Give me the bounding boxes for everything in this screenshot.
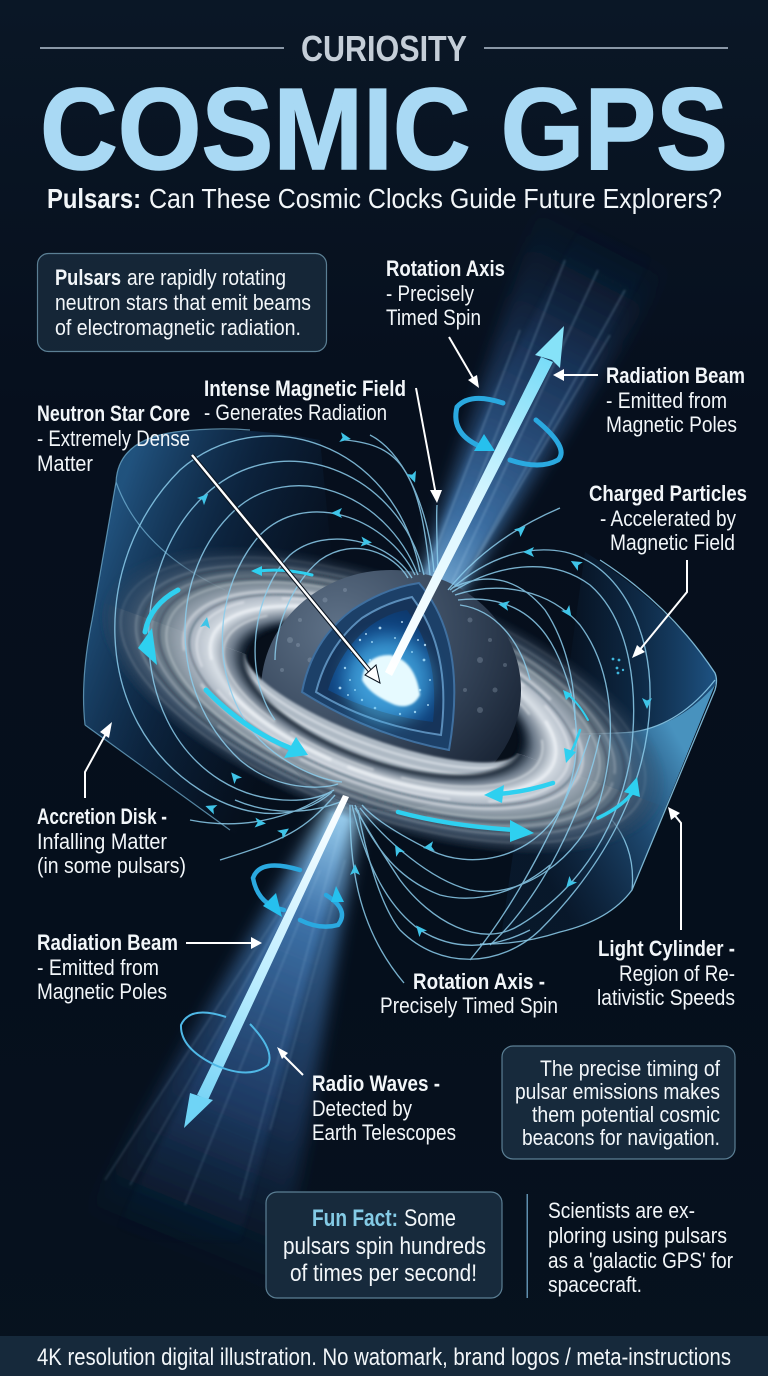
top rule left — [40, 47, 284, 49]
callout arrows — [85, 337, 687, 1075]
label: radiation beam top — [606, 363, 745, 437]
label: light cylinder: lativistic Speeds — [597, 985, 735, 1010]
label: rotation axis lower: Rotation Axis - — [413, 969, 545, 994]
label: intense magnetic field: Intense Magnetic Field — [204, 376, 406, 401]
radio wave ring — [181, 1012, 270, 1072]
label: light cylinder: Region of Re- — [619, 961, 735, 986]
label: rotation axis top — [386, 256, 505, 330]
main beam arrow: down — [184, 795, 349, 1128]
label: neutron star core — [37, 401, 190, 476]
light cylinder: left wall — [84, 429, 340, 838]
cutaway wedge — [302, 583, 454, 750]
text: scientists: spacecraft. — [548, 1272, 642, 1297]
panel: fun fact: pulsars spin hundreds — [283, 1233, 486, 1260]
label: radiation beam lower: Magnetic Poles — [37, 979, 167, 1004]
label: charged particles: - Accelerated by — [600, 506, 737, 531]
field line arrowheads — [197, 432, 652, 937]
accretion disk: back layer — [59, 481, 707, 919]
disk arrowheads — [138, 566, 640, 842]
label: neutron star core: Neutron Star Core — [37, 401, 190, 426]
label: radiation beam lower: Radiation Beam — [37, 930, 178, 955]
label: radio waves: Detected by — [312, 1096, 413, 1121]
panel: precise timing: them potential cosmic — [532, 1102, 720, 1127]
label: radio waves — [312, 1071, 456, 1145]
accretion disk: front layer — [116, 609, 642, 850]
label: accretion disk: Infalling Matter — [37, 829, 167, 854]
panel: pulsars intro: are rapidly rotating — [127, 265, 286, 290]
panel: fun fact — [266, 1192, 502, 1298]
label: radio waves: Radio Waves - — [312, 1071, 440, 1096]
subtitle: Pulsars: — [47, 183, 141, 214]
panel: fun fact: Some — [404, 1205, 456, 1232]
label: radiation beam lower — [37, 930, 178, 1004]
label: light cylinder: Light Cylinder - — [598, 936, 735, 961]
neutron star core glow — [344, 636, 432, 724]
panel: precise timing — [502, 1046, 735, 1159]
label: neutron star core: Matter — [37, 451, 93, 476]
label: rotation axis top: - Precisely — [386, 281, 475, 306]
text: scientists: as a 'galactic GPS' for — [548, 1248, 733, 1273]
lower rotation ring — [253, 866, 344, 927]
main beam arrow: up — [385, 326, 564, 676]
light cylinder: right wall — [480, 552, 716, 945]
panel: precise timing: beacons for navigation. — [522, 1125, 720, 1150]
upper rotation ring — [456, 398, 561, 465]
label: radio waves: Earth Telescopes — [312, 1120, 456, 1145]
label: intense magnetic field — [204, 376, 406, 425]
text: scientists: ploring using pulsars — [548, 1223, 727, 1248]
arrow: neutron core — [192, 455, 380, 683]
label: accretion disk: Accretion Disk - — [37, 804, 167, 829]
panel: pulsars intro: neutron stars that emit beams — [55, 290, 311, 315]
text: scientists: Scientists are ex- — [548, 1198, 695, 1223]
panel: pulsars intro: of electromagnetic radiation. — [55, 315, 301, 340]
label: radiation beam lower: - Emitted from — [37, 955, 159, 980]
neutron star sphere — [261, 570, 521, 810]
label: radiation beam top: - Emitted from — [606, 388, 727, 413]
label: light cylinder — [597, 936, 735, 1010]
illustration: pulsar diagram — [40, 205, 716, 1290]
magnetic field lines — [115, 435, 650, 983]
arrowheads for callouts — [100, 369, 680, 1059]
kicker: CURIOSITY — [301, 28, 467, 69]
upper radiation beam glow — [392, 205, 700, 668]
label: rotation axis top: Timed Spin — [386, 305, 481, 330]
panel: precise timing: pulsar emissions makes — [515, 1079, 720, 1104]
label: rotation axis lower — [380, 969, 558, 1018]
label: charged particles: Magnetic Field — [610, 530, 735, 555]
label: rotation axis top: Rotation Axis — [386, 256, 505, 281]
divider — [526, 1194, 528, 1298]
title: COSMIC GPS — [40, 64, 728, 194]
label: charged particles — [589, 481, 747, 555]
label: radiation beam top: Magnetic Poles — [606, 412, 737, 437]
label: intense magnetic field: - Generates Radiation — [204, 400, 387, 425]
disk rotation arrows — [145, 570, 634, 830]
panel: precise timing: The precise timing of — [540, 1056, 721, 1081]
top rule right — [484, 47, 728, 49]
panel: fun fact: of times per second! — [290, 1260, 477, 1287]
footer bar — [0, 1336, 768, 1376]
panel: fun fact: Fun Fact: — [312, 1205, 398, 1232]
text: scientists — [548, 1198, 733, 1297]
panel: pulsars intro — [38, 254, 326, 352]
label: rotation axis lower: Precisely Timed Spin — [380, 993, 558, 1018]
lower radiation beam glow — [40, 790, 362, 1290]
panel: pulsars intro: Pulsars — [55, 265, 121, 290]
label: accretion disk: (in some pulsars) — [37, 853, 186, 878]
charged particle dots — [612, 658, 624, 674]
label: accretion disk — [37, 804, 186, 878]
label: neutron star core: - Extremely Dense — [37, 426, 190, 451]
